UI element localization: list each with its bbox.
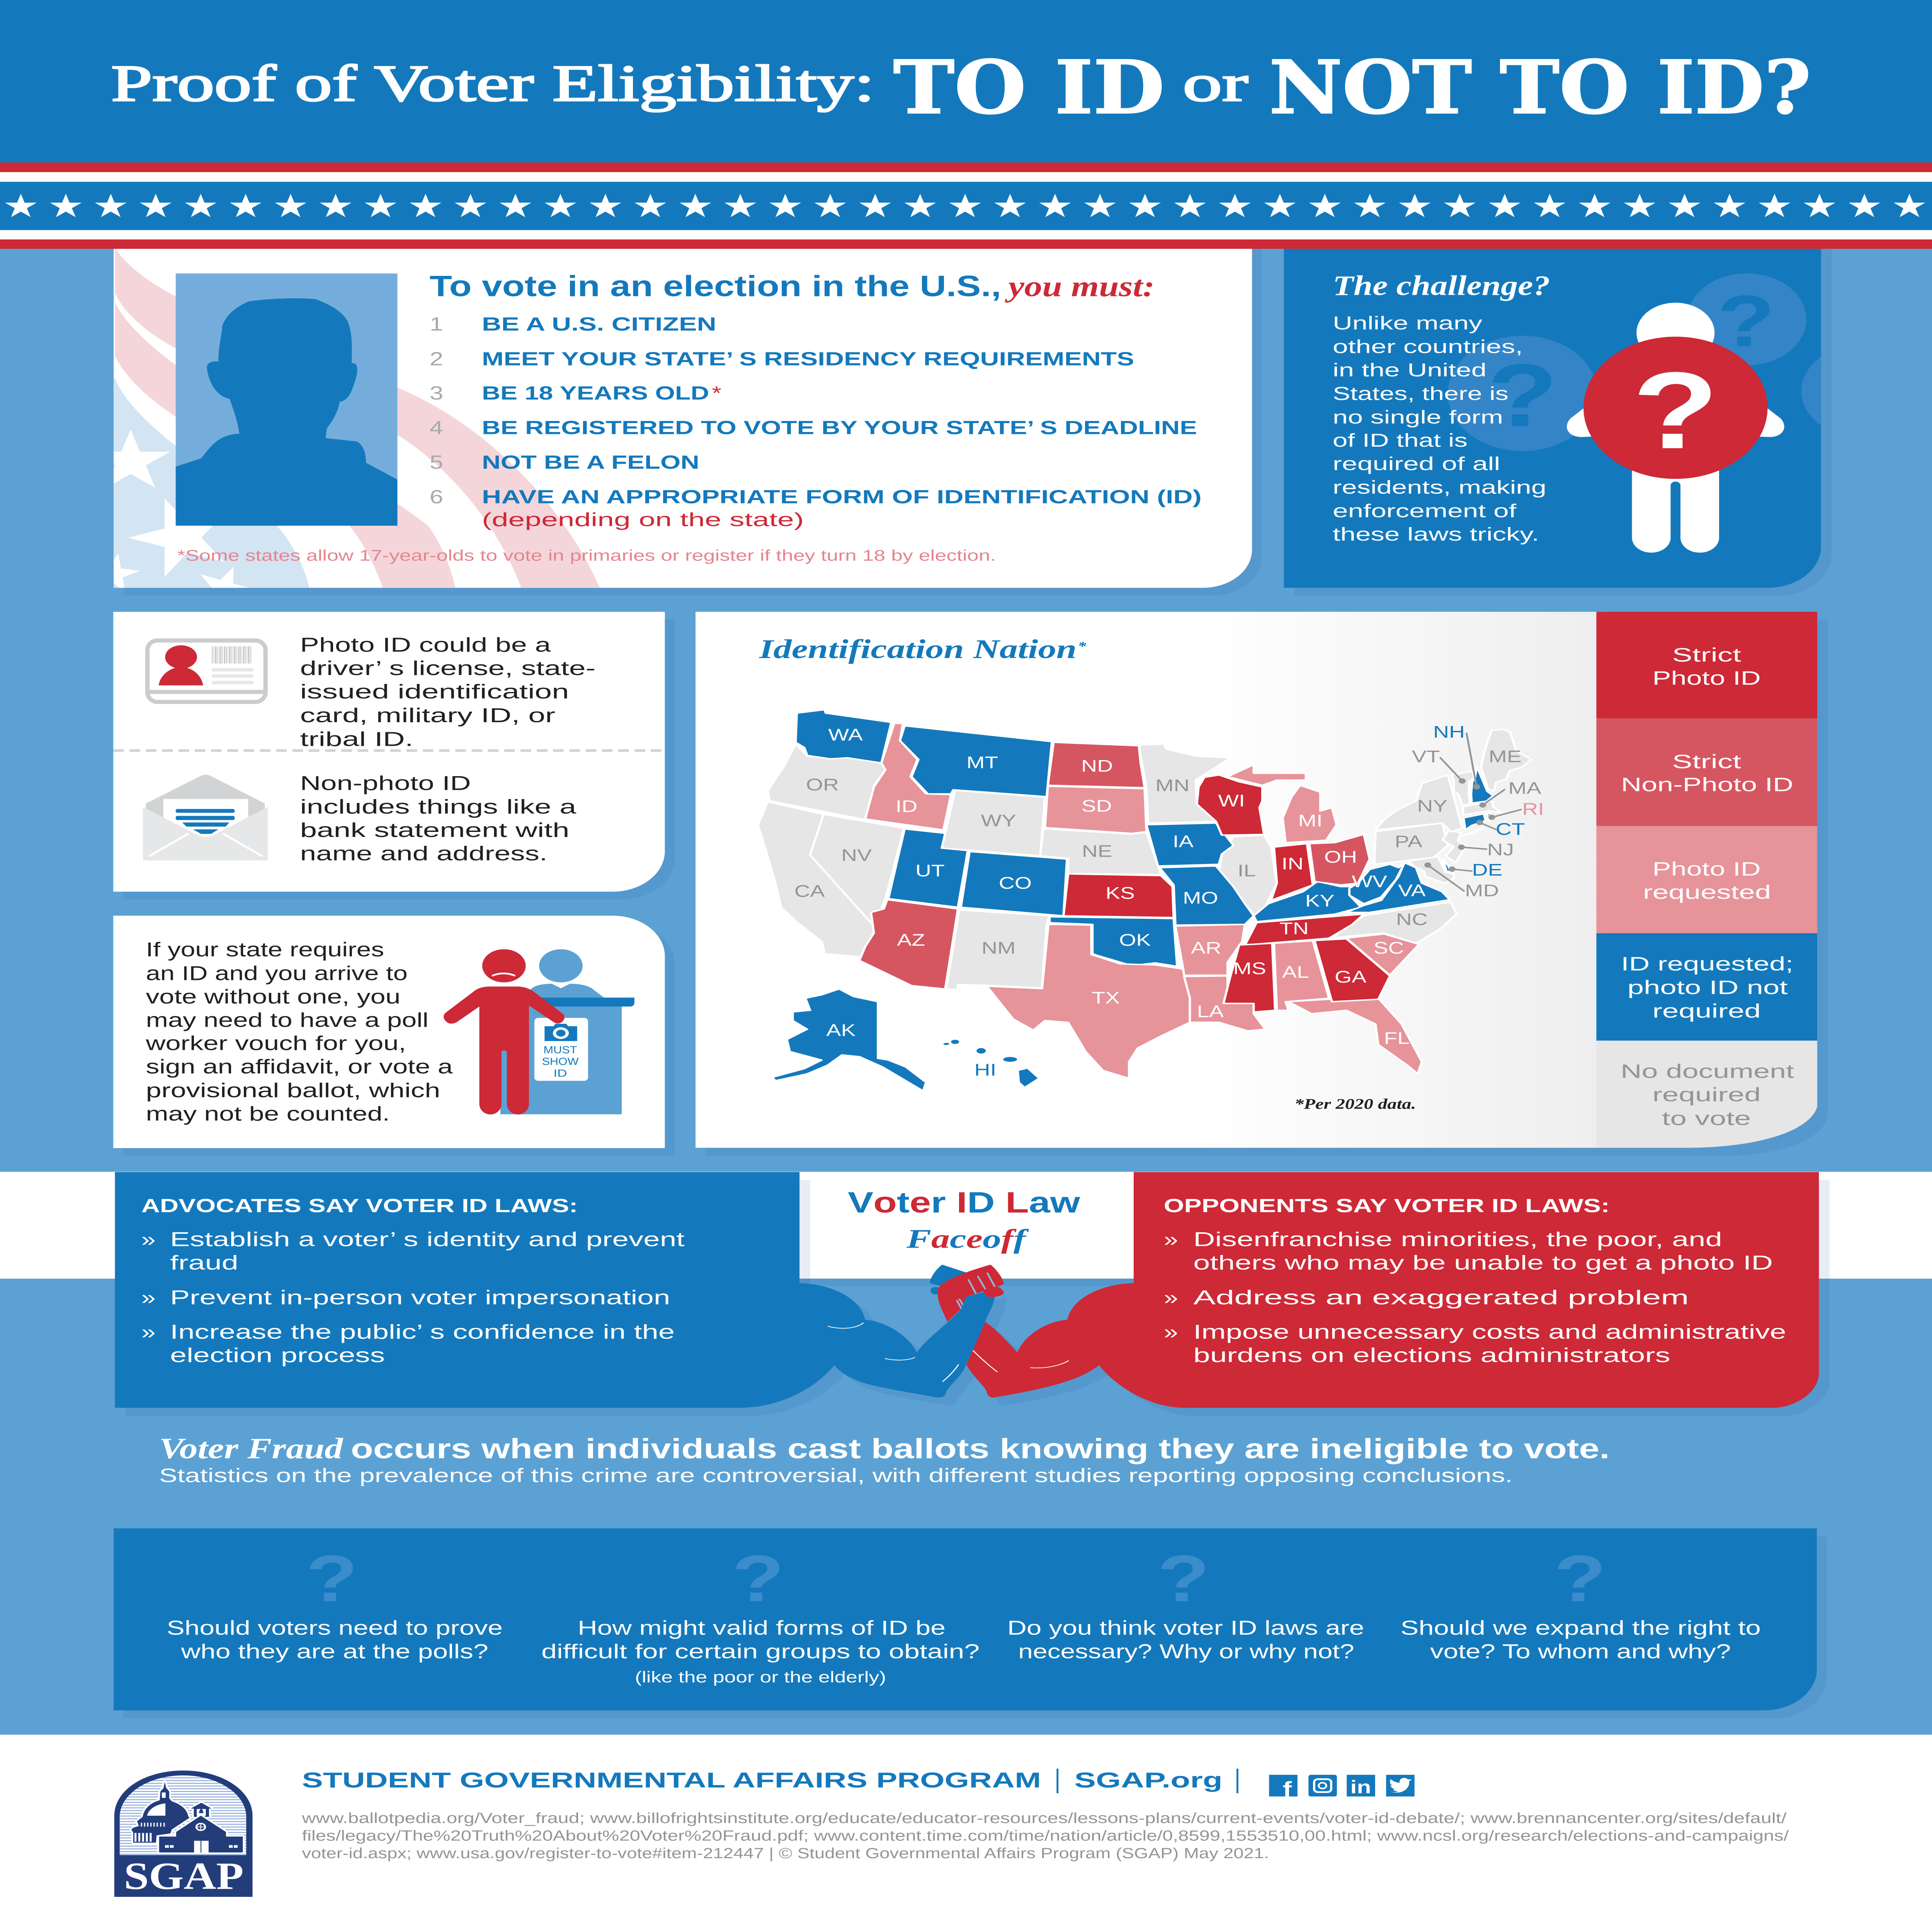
state labels: WY xyxy=(981,811,1016,830)
data note: *Per 2020 data. xyxy=(1294,1096,1416,1112)
opponents text: Impose unnecessary costs and administrative xyxy=(1193,1321,1786,1343)
map title: Identification Nation xyxy=(759,634,1077,664)
question 4: Should we expand the right to xyxy=(1401,1617,1761,1639)
panel: discussion questions xyxy=(114,1528,1827,1718)
icon: ghost question marks xyxy=(1448,274,1821,451)
question 1: Should voters need to prove xyxy=(167,1617,503,1639)
state labels: LA xyxy=(1197,1002,1224,1021)
state labels: SC xyxy=(1374,938,1404,957)
state labels: AL xyxy=(1282,963,1309,981)
non-photo ID text xyxy=(300,772,577,865)
icon: voter at poll desk: ID xyxy=(553,1067,567,1079)
map legend: Strict xyxy=(1672,645,1741,666)
footnote: *Some states allow 17-year-olds to vote in primaries or register if they turn 18 by election. xyxy=(177,547,996,564)
no-ID text: vote without one, you xyxy=(146,985,400,1008)
non-photo ID text: Non-photo ID xyxy=(300,772,471,794)
program name: SGAP.org xyxy=(1074,1768,1223,1792)
question 2 xyxy=(541,1617,980,1686)
state labels: SD xyxy=(1082,796,1112,815)
faceoff title: Faceoff xyxy=(906,1224,1029,1254)
state labels: WI xyxy=(1218,791,1245,810)
state labels: CO xyxy=(999,873,1032,893)
requirements list: HAVE AN APPROPRIATE FORM OF IDENTIFICATION (ID) xyxy=(482,486,1202,508)
panel: photo and non-photo ID xyxy=(113,612,675,899)
state labels: MT xyxy=(966,753,998,772)
photo ID text: tribal ID. xyxy=(300,728,413,750)
requirements list: (depending on the state) xyxy=(482,509,804,531)
advocates text: ADVOCATES SAY VOTER ID LAWS: xyxy=(141,1195,578,1216)
photo ID text: driver’ s license, state- xyxy=(300,657,595,679)
panel: opponents with red arm xyxy=(930,1172,1819,1408)
logo: SGAP: SGAP xyxy=(124,1855,243,1897)
state labels: NV xyxy=(841,845,872,865)
title: TO ID xyxy=(893,44,1165,130)
state labels: VA xyxy=(1398,881,1426,900)
state labels: OH xyxy=(1324,847,1357,866)
requirements list: NOT BE A FELON xyxy=(482,452,699,473)
question 3 xyxy=(1007,1617,1364,1663)
state labels: KY xyxy=(1305,891,1335,910)
requirements list: MEET YOUR STATE’ S RESIDENCY REQUIREMENTS xyxy=(482,348,1134,370)
no-ID text: may not be counted. xyxy=(146,1102,390,1125)
heading: to vote you must: you must: xyxy=(1005,270,1155,303)
white faceoff band xyxy=(0,1172,1932,1279)
sources text: www.ballotpedia.org/Voter_fraud; www.billofrightsinstitute.org/educate/educator-resources/lessons-plans/current-events/voter-id-debate/; www.brennancenter.org/sites/default/ xyxy=(301,1810,1787,1827)
heading: to vote you must: To vote in an election in the U.S., xyxy=(430,270,1001,303)
icon: person with question mark xyxy=(1567,303,1784,553)
icon: ghost question marks: ? xyxy=(1717,281,1775,362)
challenge text: Unlike many xyxy=(1333,312,1482,333)
voter fraud statement xyxy=(159,1432,1610,1486)
requirements list: 4 xyxy=(430,417,443,439)
question 2: difficult for certain groups to obtain? xyxy=(541,1640,980,1663)
no-ID text: may need to have a poll xyxy=(146,1009,429,1031)
map legend: required xyxy=(1652,1084,1761,1105)
map legend: photo ID not xyxy=(1628,977,1787,998)
map legend: Strict xyxy=(1672,751,1741,772)
state labels: GA xyxy=(1335,967,1366,986)
icons: question marks: ? xyxy=(306,1542,358,1615)
state labels: AZ xyxy=(897,930,925,949)
state labels: FL xyxy=(1384,1029,1410,1048)
requirements list: BE 18 YEARS OLD xyxy=(482,383,709,404)
map title: * xyxy=(1078,639,1087,653)
opponents text: » xyxy=(1164,1286,1178,1309)
challenge text: required of all xyxy=(1333,453,1500,474)
state labels: TX xyxy=(1092,988,1120,1007)
requirements list: BE A U.S. CITIZEN xyxy=(482,313,716,335)
map legend: Photo ID xyxy=(1652,668,1761,689)
question 2: (like the poor or the elderly) xyxy=(635,1668,886,1686)
icons: social media: f xyxy=(1283,1778,1292,1801)
icon: voter at poll desk: SHOW xyxy=(542,1055,579,1067)
question 3: Do you think voter ID laws are xyxy=(1007,1617,1364,1639)
program name: STUDENT GOVERNMENTAL AFFAIRS PROGRAM xyxy=(302,1768,1041,1792)
no-ID text: sign an affidavit, or vote a xyxy=(146,1055,453,1078)
requirements list: 5 xyxy=(430,452,443,473)
logo: SGAP xyxy=(114,1770,253,1897)
challenge text: of ID that is xyxy=(1333,430,1468,451)
state labels: MO xyxy=(1183,888,1218,907)
state labels: PA xyxy=(1395,832,1422,851)
sources text xyxy=(301,1810,1789,1862)
voter fraud statement: occurs when individuals cast ballots knowing they are ineligible to vote. xyxy=(351,1433,1610,1464)
state labels: NC xyxy=(1396,910,1428,929)
advocates text: Prevent in-person voter impersonation xyxy=(170,1286,670,1309)
state labels: AK xyxy=(827,1020,856,1040)
question 1: who they are at the polls? xyxy=(180,1640,488,1663)
state labels: NE xyxy=(1082,842,1112,861)
state labels: ND xyxy=(1081,756,1113,775)
us map states xyxy=(758,710,1531,1091)
map legend: Non-Photo ID xyxy=(1621,774,1793,796)
advocates text: » xyxy=(141,1286,156,1309)
no-ID text: worker vouch for you, xyxy=(145,1032,406,1054)
icons: question marks: ? xyxy=(1554,1542,1606,1615)
opponents text: » xyxy=(1164,1321,1178,1343)
requirements list: 1 xyxy=(430,313,443,335)
patriotic stripe band with stars xyxy=(0,162,1932,249)
icon: voter at poll desk: MUST xyxy=(543,1044,577,1056)
title: Proof of Voter Eligibility: xyxy=(111,54,875,112)
question 1 xyxy=(167,1617,503,1663)
challenge text: no single form xyxy=(1333,406,1503,428)
map legend: ID requested; xyxy=(1621,953,1793,975)
opponents text: Address an exaggerated problem xyxy=(1193,1286,1689,1309)
advocates text: fraud xyxy=(170,1252,238,1274)
challenge text: other countries, xyxy=(1333,336,1523,357)
panel: advocates with blue arm xyxy=(115,1172,1068,1408)
map legend: required xyxy=(1652,1000,1761,1022)
opponents text: others who may be unable to get a photo ID xyxy=(1193,1252,1773,1274)
icon: envelope xyxy=(143,775,268,861)
state labels: OR xyxy=(806,775,839,794)
opponents text: » xyxy=(1164,1228,1178,1250)
panel: identification nation map xyxy=(696,612,1828,1156)
program name xyxy=(302,1768,1238,1793)
challenge text: residents, making xyxy=(1333,476,1546,498)
panel shadows xyxy=(126,1180,1830,1416)
state labels: MS xyxy=(1233,959,1266,978)
challenge text xyxy=(1333,312,1546,545)
state labels: MI xyxy=(1298,811,1323,830)
state labels: MN xyxy=(1155,776,1190,795)
icons: question marks: ? xyxy=(1157,1542,1209,1615)
challenge text: enforcement of xyxy=(1333,500,1517,521)
footer xyxy=(0,1735,1932,1932)
icons: social media xyxy=(1269,1775,1415,1801)
no-ID text: If your state requires xyxy=(146,938,384,961)
no-ID text: an ID and you arrive to xyxy=(146,962,408,985)
state labels: CA xyxy=(794,881,825,901)
sources text: voter-id.aspx; www.usa.gov/register-to-vote#item-212447 | © Student Governmental Affairs Program (SGAP) May 2021. xyxy=(302,1845,1269,1862)
no-ID text: provisional ballot, which xyxy=(146,1079,440,1102)
panel: the challenge xyxy=(1284,249,1832,596)
state labels: NM xyxy=(981,938,1016,957)
state labels: OK xyxy=(1119,930,1151,949)
title: or xyxy=(1183,54,1248,112)
heading: the challenge: The challenge? xyxy=(1333,270,1550,301)
state labels: AR xyxy=(1191,938,1221,957)
non-photo ID text: bank statement with xyxy=(300,819,570,841)
question 2: How might valid forms of ID be xyxy=(578,1617,946,1639)
state labels: RI xyxy=(1522,799,1544,818)
map legend: to vote xyxy=(1662,1108,1751,1129)
advocates text xyxy=(141,1195,685,1366)
state labels: NJ xyxy=(1487,840,1514,859)
map legend xyxy=(1596,612,1817,1148)
icons: social media: in xyxy=(1350,1777,1371,1797)
state labels: UT xyxy=(915,861,945,880)
opponents text: burdens on elections administrators xyxy=(1193,1344,1670,1366)
state labels: MD xyxy=(1465,881,1499,900)
state labels: ME xyxy=(1488,747,1522,766)
state labels: KS xyxy=(1105,883,1135,902)
opponents text: OPPONENTS SAY VOTER ID LAWS: xyxy=(1164,1195,1610,1216)
icon: ID card xyxy=(147,641,265,702)
requirements list: 6 xyxy=(430,486,443,508)
photo ID text: card, military ID, or xyxy=(300,704,555,726)
icons: question marks: ? xyxy=(732,1542,784,1615)
icon: voter at poll desk xyxy=(444,949,634,1114)
icon: ghost question marks: ? xyxy=(1487,345,1558,445)
panel: voter ID law faceoff xyxy=(115,1172,1830,1416)
state labels: IN xyxy=(1282,854,1304,873)
photo ID text xyxy=(300,634,595,750)
non-photo ID text: name and address. xyxy=(300,842,548,865)
state labels: MA xyxy=(1508,779,1541,798)
requirements list: 2 xyxy=(430,348,443,370)
header banner xyxy=(0,0,1932,162)
no-ID text xyxy=(145,938,453,1125)
question 4 xyxy=(1401,1617,1761,1663)
requirements list xyxy=(430,313,1202,531)
state labels: WV xyxy=(1352,872,1387,891)
requirements list: 3 xyxy=(430,383,443,404)
panel: arriving without ID xyxy=(113,916,675,1156)
state labels: IA xyxy=(1173,832,1194,851)
map legend: requested xyxy=(1643,882,1771,903)
sources text: files/legacy/The%20Truth%20About%20Voter%20Fraud.pdf; www.content.time.com/time/nation/article/0,8599,1553510,00.html; www.ncsl.org/research/elections-and-campaigns/ xyxy=(302,1828,1789,1844)
title: NOT TO ID? xyxy=(1269,44,1811,130)
map legend: No document xyxy=(1621,1061,1794,1082)
advocates text: election process xyxy=(170,1344,385,1366)
state labels: WA xyxy=(828,725,863,744)
map legend: Photo ID xyxy=(1652,859,1761,880)
requirements list: * xyxy=(712,383,721,404)
voter fraud statement: Statistics on the prevalence of this crime are controversial, with different studies reporting opposing conclusions. xyxy=(159,1465,1513,1486)
state labels: IL xyxy=(1238,861,1256,880)
opponents text xyxy=(1164,1195,1786,1366)
voter fraud statement: Voter Fraud xyxy=(159,1432,344,1465)
state labels xyxy=(794,722,1544,1079)
photo placeholder silhouette xyxy=(176,274,397,526)
panel: voting requirements xyxy=(85,248,1262,614)
advocates text: » xyxy=(141,1228,156,1250)
icons: question marks xyxy=(306,1542,1606,1615)
faceoff title: Voter ID Law xyxy=(848,1186,1080,1219)
state labels: VT xyxy=(1412,747,1440,766)
challenge text: States, there is xyxy=(1333,383,1509,404)
photo ID text: issued identification xyxy=(300,680,569,703)
faceoff title xyxy=(848,1186,1080,1254)
advocates text: Increase the public’ s confidence in the xyxy=(170,1321,675,1343)
icon: person with question mark: ? xyxy=(1633,350,1719,471)
requirements list: BE REGISTERED TO VOTE BY YOUR STATE’ S DEADLINE xyxy=(482,417,1197,439)
question 4: vote? To whom and why? xyxy=(1430,1640,1731,1663)
state labels: DE xyxy=(1472,860,1503,879)
non-photo ID text: includes things like a xyxy=(300,796,577,818)
challenge text: these laws tricky. xyxy=(1333,524,1539,545)
advocates text: » xyxy=(141,1321,156,1343)
question 3: necessary? Why or why not? xyxy=(1018,1640,1354,1663)
state labels: NY xyxy=(1417,796,1447,815)
title xyxy=(111,44,1811,130)
state labels: ID xyxy=(896,797,918,816)
state labels: CT xyxy=(1496,820,1525,838)
state labels: TN xyxy=(1279,919,1309,938)
opponents text: Disenfranchise minorities, the poor, and xyxy=(1193,1228,1722,1250)
challenge text: in the United xyxy=(1333,359,1486,381)
advocates text: Establish a voter’ s identity and prevent xyxy=(170,1228,685,1250)
leader lines for small states xyxy=(1424,733,1522,891)
state labels: NH xyxy=(1433,722,1465,742)
photo ID text: Photo ID could be a xyxy=(300,634,551,656)
state labels: HI xyxy=(975,1060,996,1079)
